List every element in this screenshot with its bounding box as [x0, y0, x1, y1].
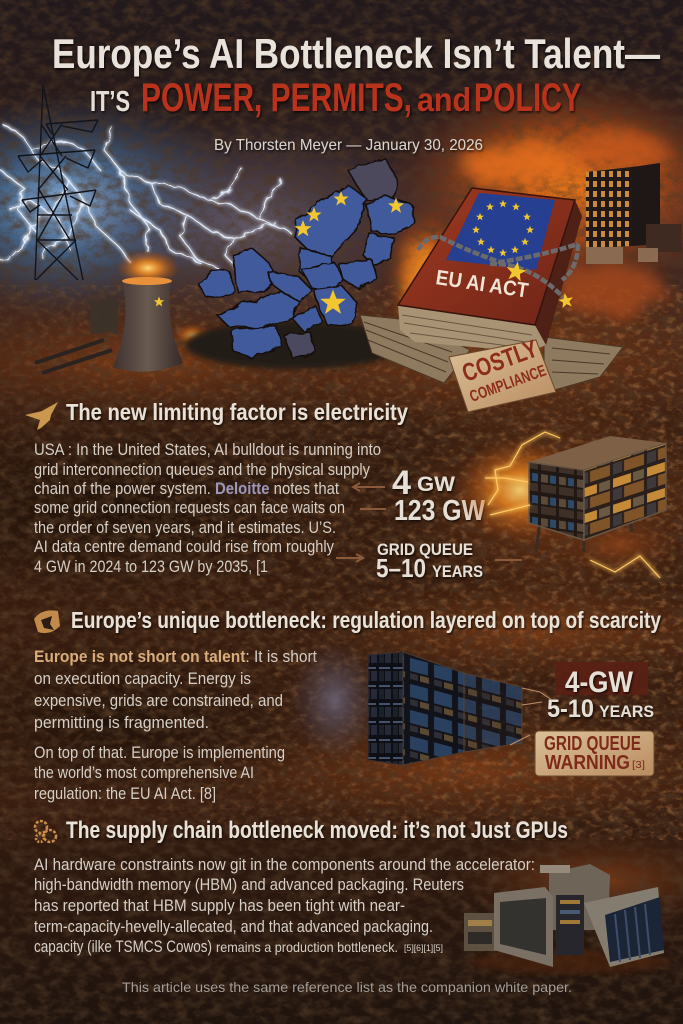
stat box: 4 GW: 4-GW [565, 666, 634, 699]
stat: 5-10 years [547, 695, 654, 723]
stat: 4 GW [392, 464, 455, 502]
icon: hardware cluster [464, 864, 670, 974]
panel: supply chain [34, 817, 670, 995]
text block: hardware: has reported that HBM supply has been tight with near- [34, 897, 405, 915]
icon: EU AI Act book [398, 188, 582, 352]
text block: USA: some grid connection requests can face waits on [34, 499, 345, 517]
panel: regulation [34, 607, 661, 803]
stat: 5-10 years: YEARS [432, 562, 483, 581]
text block: hardware: term-capacity-hevelly-allecated, and that advanced packaging. [34, 918, 433, 936]
text block: hardware [34, 856, 535, 956]
sign: costly compliance: COSTLY [458, 335, 542, 388]
sign: costly compliance: COMPLIANCE [468, 362, 549, 406]
stat: 5-10 years: 5–10 [376, 553, 426, 583]
stat: 5-10 years: YEARS [599, 702, 654, 721]
panel: electricity [25, 399, 680, 583]
stat: 5-10 years: 5-10 [547, 695, 594, 723]
text block: USA: USA : In the United States, AI bulldout is running into [34, 441, 381, 459]
text block: talent: the world’s most comprehensive AI [34, 764, 254, 782]
icon: lightning storm [0, 122, 290, 272]
text block: talent: On top of that. Europe is implementing [34, 744, 285, 762]
map: cracked Europe [185, 158, 414, 369]
warning plaque: [3] [632, 760, 645, 771]
icon: gold lightning star [25, 402, 58, 430]
warning plaque [535, 731, 654, 776]
text block: talent [34, 648, 317, 803]
heading: electricity: The new limiting factor is electricity [66, 399, 408, 425]
stat: 5-10 years [376, 553, 483, 583]
heading: supply chain: The supply chain bottleneck moved: it’s not Just GPUs [66, 817, 568, 844]
text block: talent: regulation: the EU AI Act. [8] [34, 785, 216, 803]
flames [405, 130, 670, 335]
icon: cooling tower [35, 250, 210, 373]
text block: USA [34, 441, 381, 576]
text block: talent: permitting is fragmented. [34, 714, 209, 732]
arrows [336, 483, 522, 562]
stat: grid queue: GRID QUEUE [377, 540, 473, 559]
title line 2: IT’S [90, 86, 130, 118]
text block: USA: 4 GW in 2024 to 123 GW by 2035, [1 [34, 558, 268, 576]
stat: 123 GW: 123 GW [394, 495, 486, 527]
text block: talent: expensive, grids are constrained, and [34, 692, 283, 710]
paper stacks [360, 315, 623, 393]
text block: USA: AI data centre demand could rise from roughly [34, 538, 335, 556]
text block: USA: chain of the power system. Deloitte notes that [34, 480, 339, 498]
byline: By Thorsten Meyer — January 30, 2026 [214, 137, 483, 154]
icon: glowing server [454, 432, 680, 578]
text block: USA: the order of seven years, and it estimates. U’S. [34, 519, 336, 537]
stat: 4 GW: 4 [392, 464, 411, 502]
text block: talent: on execution capacity. Energy is [34, 670, 251, 688]
label: EU AI ACT: EU AI ACT [434, 266, 530, 303]
icon: server racks [290, 640, 522, 765]
icon: gold emblem [34, 610, 60, 633]
text block: hardware: remains a production bottleneck. [216, 939, 398, 955]
title line 2: POWER, PERMITS, [141, 76, 412, 120]
sign: costly compliance [449, 335, 556, 412]
icon: gears [35, 821, 56, 842]
text block: hardware: capacity (ilke TSMCS Cowos) [34, 938, 212, 956]
icon: chains [418, 237, 578, 300]
text block: hardware: AI hardware constraints now git in the components around the accelerator: [34, 856, 535, 874]
stat: 4 GW: GW [417, 473, 455, 496]
text block: USA: grid interconnection queues and the physical supply [34, 461, 371, 479]
title line 2: and [417, 81, 471, 118]
warning plaque: WARNING [545, 752, 630, 774]
icon: transmission pylon [18, 85, 98, 280]
warning plaque: GRID QUEUE [544, 733, 641, 755]
title [52, 30, 660, 120]
text block: hardware: high-bandwidth memory (HBM) and advanced packaging. Reuters [34, 876, 464, 894]
connector lines [510, 688, 552, 745]
hero illustration [0, 85, 682, 412]
icon: burning building [586, 163, 682, 264]
text block: hardware: [5][6][1][5] [404, 943, 443, 953]
footer note: This article uses the same reference list as the companion white paper. [122, 979, 572, 995]
text block: talent: Europe is not short on talent: It is short [34, 648, 317, 666]
title line 2: POLICY [474, 76, 581, 120]
